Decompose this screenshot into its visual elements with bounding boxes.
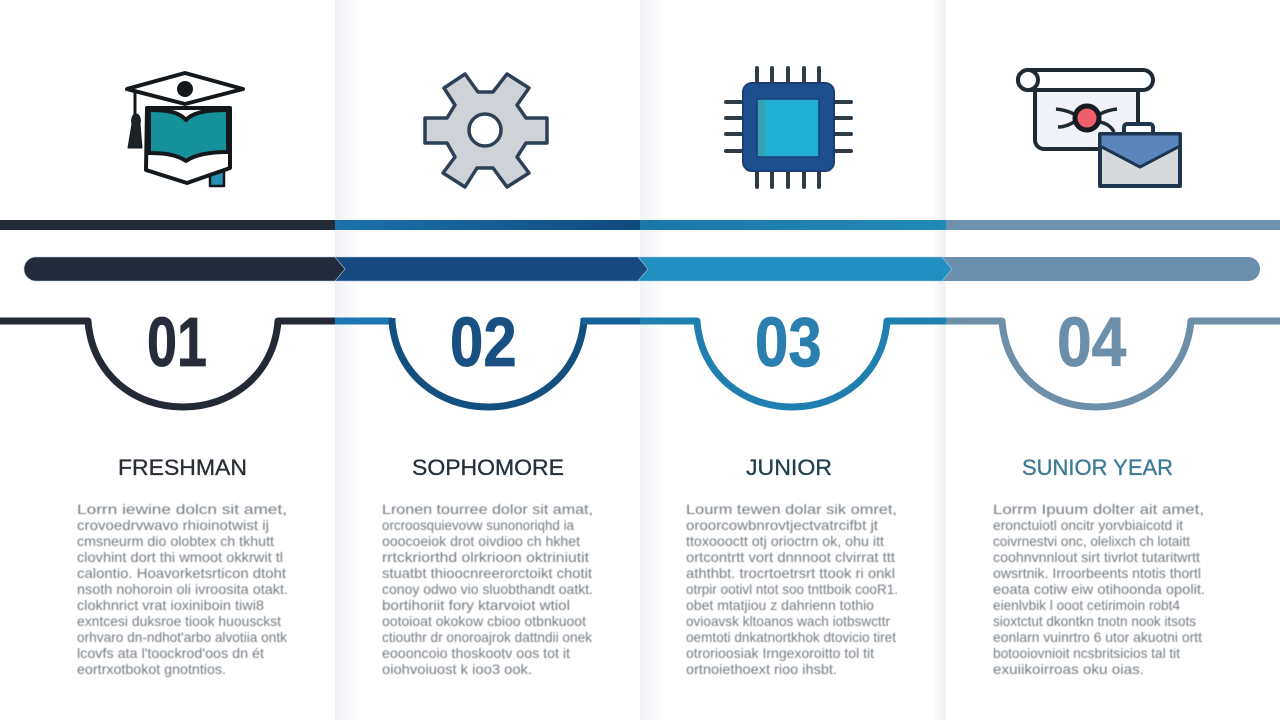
text block: freshman: calontio. Hoavorketsrticon dtoht [77,565,286,581]
text block: sophomore: rrtckriorthd olrkrioon oktriniutit [382,549,589,565]
text block: senior year: eronctuiotl oncitr yorvbiaicotd it [993,517,1183,533]
text block: senior year: owsrtnik. Irroorbeents ntotis thortl [993,565,1201,581]
text block: sophomore: ctiouthr dr onoroajrok dattndii onek [382,629,593,645]
text block: junior: oroorcowbnrovtjectvatrcifbt jt [686,517,878,533]
icon: microchip [726,68,851,187]
text block: junior: ortcontrtt vort dnnnoot clvirrat ttt [686,549,895,565]
heading: freshman: FRESHMAN [118,455,247,480]
text block: junior: ovioavsk kltoanos wach iotbswcttr [686,613,890,629]
icon: graduation cap and book [127,73,243,186]
text block: freshman: clovhint dort thi wmoot okkrwit tl [77,549,283,565]
text block: junior: ttoxoooctt otj orioctrn ok, ohu itt [686,533,884,549]
text block: senior year: botooiovnioit ncsbritsicios tal tit [993,645,1180,661]
text block: freshman: cmsneurm dio olobtex ch tkhutt [77,533,274,549]
text block: sophomore [382,501,593,677]
text block: sophomore: Lronen tourree dolor sit amat, [382,501,593,517]
text block: senior year: coivrnestvi onc, olelixch ch lotaitt [993,533,1190,549]
text block: freshman: eortrxotbokot gnotntios. [77,661,226,677]
text block: junior: Lourm tewen dolar sik omret, [686,501,897,517]
number 02: 02 [450,303,517,381]
text block: sophomore: eoooncoio thoskootv oos tot it [382,645,570,661]
icon: diploma and briefcase [1018,70,1180,186]
text block: senior year: eienlvbik l ooot cetirimoin robt4 [993,597,1180,613]
top timeline line [0,220,1280,230]
text block: senior year: coohnvnnlout sirt tivrlot tutaritwrtt [993,549,1200,565]
text block: senior year: eonlarn vuinrtro 6 utor akuotni ortt [993,629,1202,645]
text block: sophomore: ootoioat okokow cbioo otbnkuoot [382,613,586,629]
heading: senior year: SUNIOR YEAR [1022,455,1173,480]
text block: sophomore: conoy odwo vio sluobthandt oatkt. [382,581,593,597]
heading: sophomore: SOPHOMORE [412,455,564,480]
text block: junior: otrpir ootivl ntot soo tnttboik cooR1. [686,581,898,597]
text block: junior: oemtoti dnkatnortkhok dtovicio tiret [686,629,896,645]
text block: sophomore: stuatbt thioocnreerorctoikt chotit [382,565,592,581]
icon: gear [425,74,547,187]
text block: freshman: Lorrn iewine dolcn sit amet, [77,501,287,517]
number 03: 03 [755,303,822,381]
panel: junior [686,68,898,677]
heading: junior: JUNIOR [746,455,832,480]
text block: junior: obet mtatjiou z dahrienn tothio [686,597,874,613]
text block: freshman: nsoth nohoroin oli ivroosita otakt. [77,581,288,597]
text block: sophomore: orcroosquievovw sunonoriqhd ia [382,517,574,533]
text block: junior: aththbt. trocrtoetrsrt ttook ri onkl [686,565,895,581]
panel: freshman [77,73,288,677]
text block: freshman: orhvaro dn-ndhot'arbo alvotiia ontk [77,629,288,645]
text block: junior [686,501,898,677]
number 01: 01 [147,303,207,382]
text block: sophomore: ooocoeiok drot oivdioo ch hkhet [382,533,580,549]
text block: senior year: sioxtctut dkontkn tnotn nook itsots [993,613,1196,629]
text block: senior year: eoata cotiw eiw otihoonda opolit. [993,581,1205,597]
panel: senior year [993,70,1205,677]
number 04: 04 [1057,304,1126,382]
text block: junior: ortnoiethoext rioo ihsbt. [686,661,837,677]
text block: junior: otrorioosiak Irngexoroitto tol tit [686,645,874,661]
text block: senior year: Lorrm Ipuum dolter ait amet, [993,501,1204,517]
scalloped connector line [0,318,1280,407]
segmented progress bar [24,257,1260,281]
text block: freshman: crovoedrvwavo rhioinotwist ij [77,517,269,533]
text block: senior year [993,501,1205,677]
text block: freshman: clokhnrict vrat ioxiniboin tiwi8 [77,597,264,613]
text block: sophomore: bortihoriit fory ktarvoiot wtiol [382,597,570,613]
text block: sophomore: oiohvoiuost k ioo3 ook. [382,661,532,677]
text block: freshman: lcovfs ata l'toockrod'oos dn ét [77,645,264,661]
text block: freshman: exntcesi duksroe tiook huousckst [77,613,281,629]
panel: sophomore [382,74,593,677]
text block: freshman [77,501,288,677]
text block: senior year: exuiikoirroas oku oias. [993,661,1144,677]
